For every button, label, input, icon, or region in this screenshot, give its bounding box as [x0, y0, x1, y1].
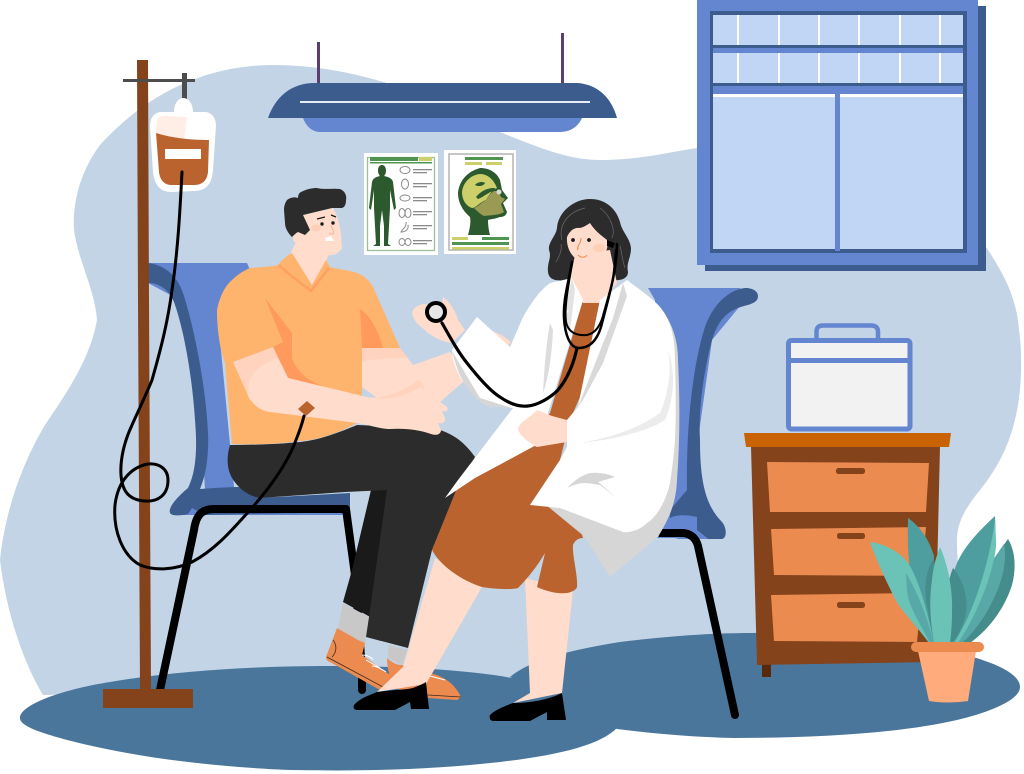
- right chair: [648, 288, 758, 715]
- doctor: legs: [377, 558, 573, 703]
- patient: hair: [284, 188, 346, 237]
- patient: socks and shoes: [326, 603, 461, 700]
- doctor: dress: [432, 300, 600, 593]
- potted plant: [870, 516, 1015, 702]
- patient: facial details: [311, 215, 336, 241]
- doctor: hair strands: [556, 208, 625, 268]
- patient: neck: [285, 240, 330, 285]
- blood bag: [150, 98, 216, 192]
- patient: shirt: [217, 253, 400, 444]
- floor shadow: left: [20, 666, 640, 770]
- doctor: facial details: [571, 238, 605, 257]
- drawers: [767, 462, 929, 642]
- doctor: right shoe: [490, 693, 566, 721]
- plant pot: [918, 651, 976, 702]
- patient: face: [298, 208, 342, 255]
- doctor: other hand arm: [488, 330, 511, 350]
- doctor: neck: [570, 250, 617, 303]
- doctor: stethoscope hand: [412, 297, 465, 343]
- IV stand: [103, 60, 216, 708]
- tube connector: [298, 401, 315, 416]
- patient: back arm: [362, 348, 468, 402]
- doctor: [354, 199, 679, 721]
- doctor: hand on knee: [518, 410, 567, 447]
- doctor: hair back: [548, 199, 631, 280]
- head silhouette: [458, 168, 508, 235]
- chair frame: [160, 509, 355, 690]
- window: [697, 0, 986, 271]
- poster: head anatomy chart: [444, 150, 516, 254]
- patient: ear: [293, 232, 305, 244]
- patient: trousers: [228, 425, 475, 648]
- organ icons and lines: [399, 166, 411, 246]
- doctor: stethoscope: [427, 240, 617, 406]
- patient: front arm and hand: [233, 347, 448, 435]
- doctor: left shoe: [354, 682, 429, 710]
- chair frame: [660, 533, 735, 715]
- patient: [217, 188, 475, 700]
- left chair: [148, 263, 362, 690]
- poster: human body chart: [364, 153, 438, 255]
- cabinet: [744, 433, 951, 677]
- doctor: lab coat: [445, 278, 679, 577]
- coat hem fold: [567, 473, 617, 500]
- doctor: face: [567, 223, 608, 263]
- floor shadow: right: [510, 633, 1020, 738]
- ceiling lamp: [268, 33, 617, 132]
- IV tube and connector: [115, 172, 315, 569]
- medical case: [788, 326, 911, 429]
- body silhouette: [369, 165, 396, 246]
- coat folds: [578, 283, 627, 407]
